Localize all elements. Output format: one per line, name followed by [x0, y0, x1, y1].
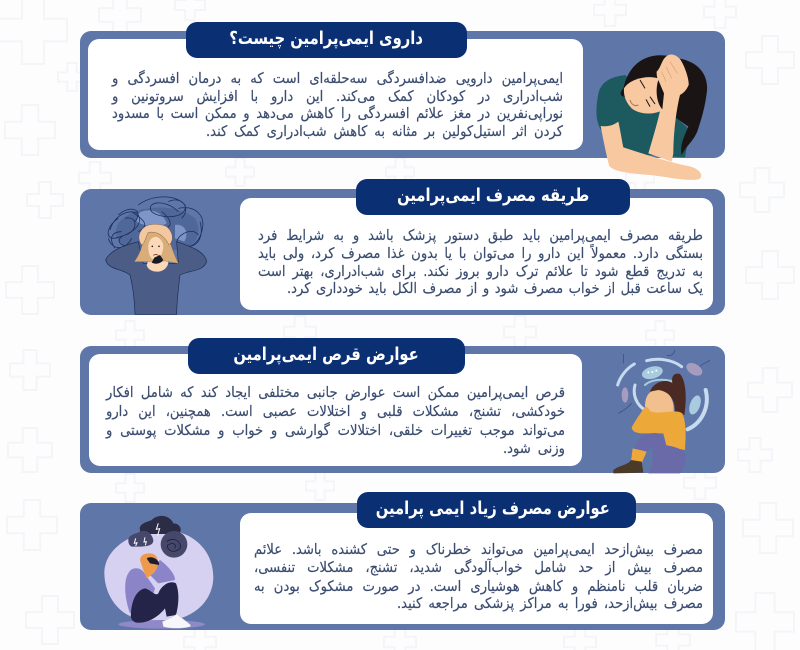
body text: بستگی دارد. معمولاً این دارو را می‌توان با یا بدون غذا مصرف کرد، ولی باید [258, 245, 703, 262]
heading [356, 179, 630, 215]
heading [186, 22, 467, 58]
body text: یک ساعت قبل از خواب مصرف شود و از مصرف الکل باید خودداری کرد. [287, 280, 703, 297]
heading [188, 338, 465, 374]
panel: how to use [80, 179, 725, 315]
panel background [80, 503, 725, 630]
text card [89, 354, 582, 466]
panel: overdose side effects [80, 492, 725, 630]
body text: خودکشی، تشنج، مشکلات قلبی و اختلالات عصبی است. همچنین، این دارو [106, 403, 565, 420]
body text [105, 384, 565, 457]
panel: side effects of the tablet [80, 338, 725, 473]
body text: ایمی‌پرامین دارویی ضدافسردگی سه‌حلقه‌ای است که به درمان افسردگی و [112, 70, 563, 87]
body text: می‌تواند موجب تغییرات خلقی، اختلالات گوارشی و خواب و مشکلات پوستی و [106, 422, 565, 439]
body text: قرص ایمی‌پرامین ممکن است عوارض جانبی مختلفی ایجاد کند که شامل افکار [106, 384, 565, 401]
heading: عوارض مصرف زیاد ایمی پرامین [376, 498, 610, 519]
body text: مصرف بیش‌ازحد ایمی‌پرامین می‌تواند خطرناک و حتی کشنده باشد. علائم [254, 541, 703, 558]
body text [258, 227, 703, 297]
body text: ضربان قلب نامنظم و کاهش هوشیاری است. در صورت مشکوک بودن به [254, 578, 703, 595]
body text: وزنی شود. [503, 440, 565, 457]
text card [240, 513, 713, 624]
body text: کردن اثر استیل‌کولین بر مثانه به کاهش شب‌ادراری کمک کند. [206, 123, 563, 140]
panel background [80, 346, 725, 473]
panel background [80, 31, 725, 158]
heading: داروی ایمی‌پرامین چیست؟ [230, 28, 423, 49]
body text: مصرف بیش از حد شامل خواب‌آلودگی شدید، تشنج، مشکلات تنفسی، [254, 559, 703, 576]
heading: عوارض قرص ایمی‌پرامین [234, 344, 419, 365]
body text: نوراپی‌نفرین در مغز علائم افسردگی را کاهش می‌دهد و ممکن است با مسدود [112, 105, 563, 122]
heading: طریقه مصرف ایمی‌پرامین [397, 185, 589, 206]
panel background [80, 189, 725, 315]
heading [357, 492, 636, 528]
panel: what is imipramine [80, 22, 725, 158]
body text [111, 70, 564, 140]
body text: به تدریج قطع شود تا علائم ترک دارو بروز نکند. برای شب‌ادراری، بهتر است [258, 263, 703, 280]
body text [254, 541, 703, 612]
body text: شب‌ادراری در کودکان کمک می‌کند. این دارو با افزایش سروتونین و [112, 88, 563, 105]
text card [240, 198, 713, 310]
text card [88, 39, 583, 150]
body text: طریقه مصرف ایمی‌پرامین باید طبق دستور پزشک باشد و به شرایط فرد [258, 227, 703, 244]
body text: مصرف بیش‌ازحد، فورا به مراکز پزشکی مراجعه کنید. [397, 595, 703, 612]
